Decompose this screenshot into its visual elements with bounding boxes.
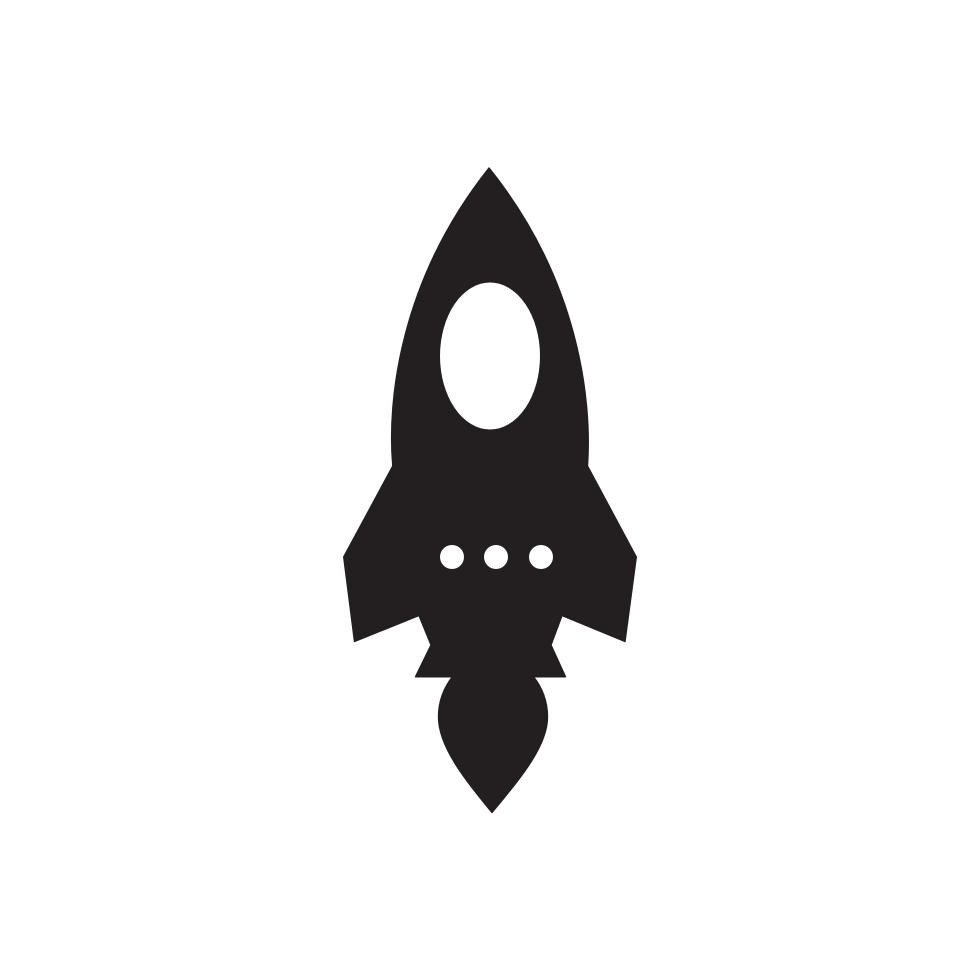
window <box>440 282 540 430</box>
flame <box>438 676 548 812</box>
dots <box>440 545 553 569</box>
rocket body with fins and nozzle <box>344 168 636 677</box>
